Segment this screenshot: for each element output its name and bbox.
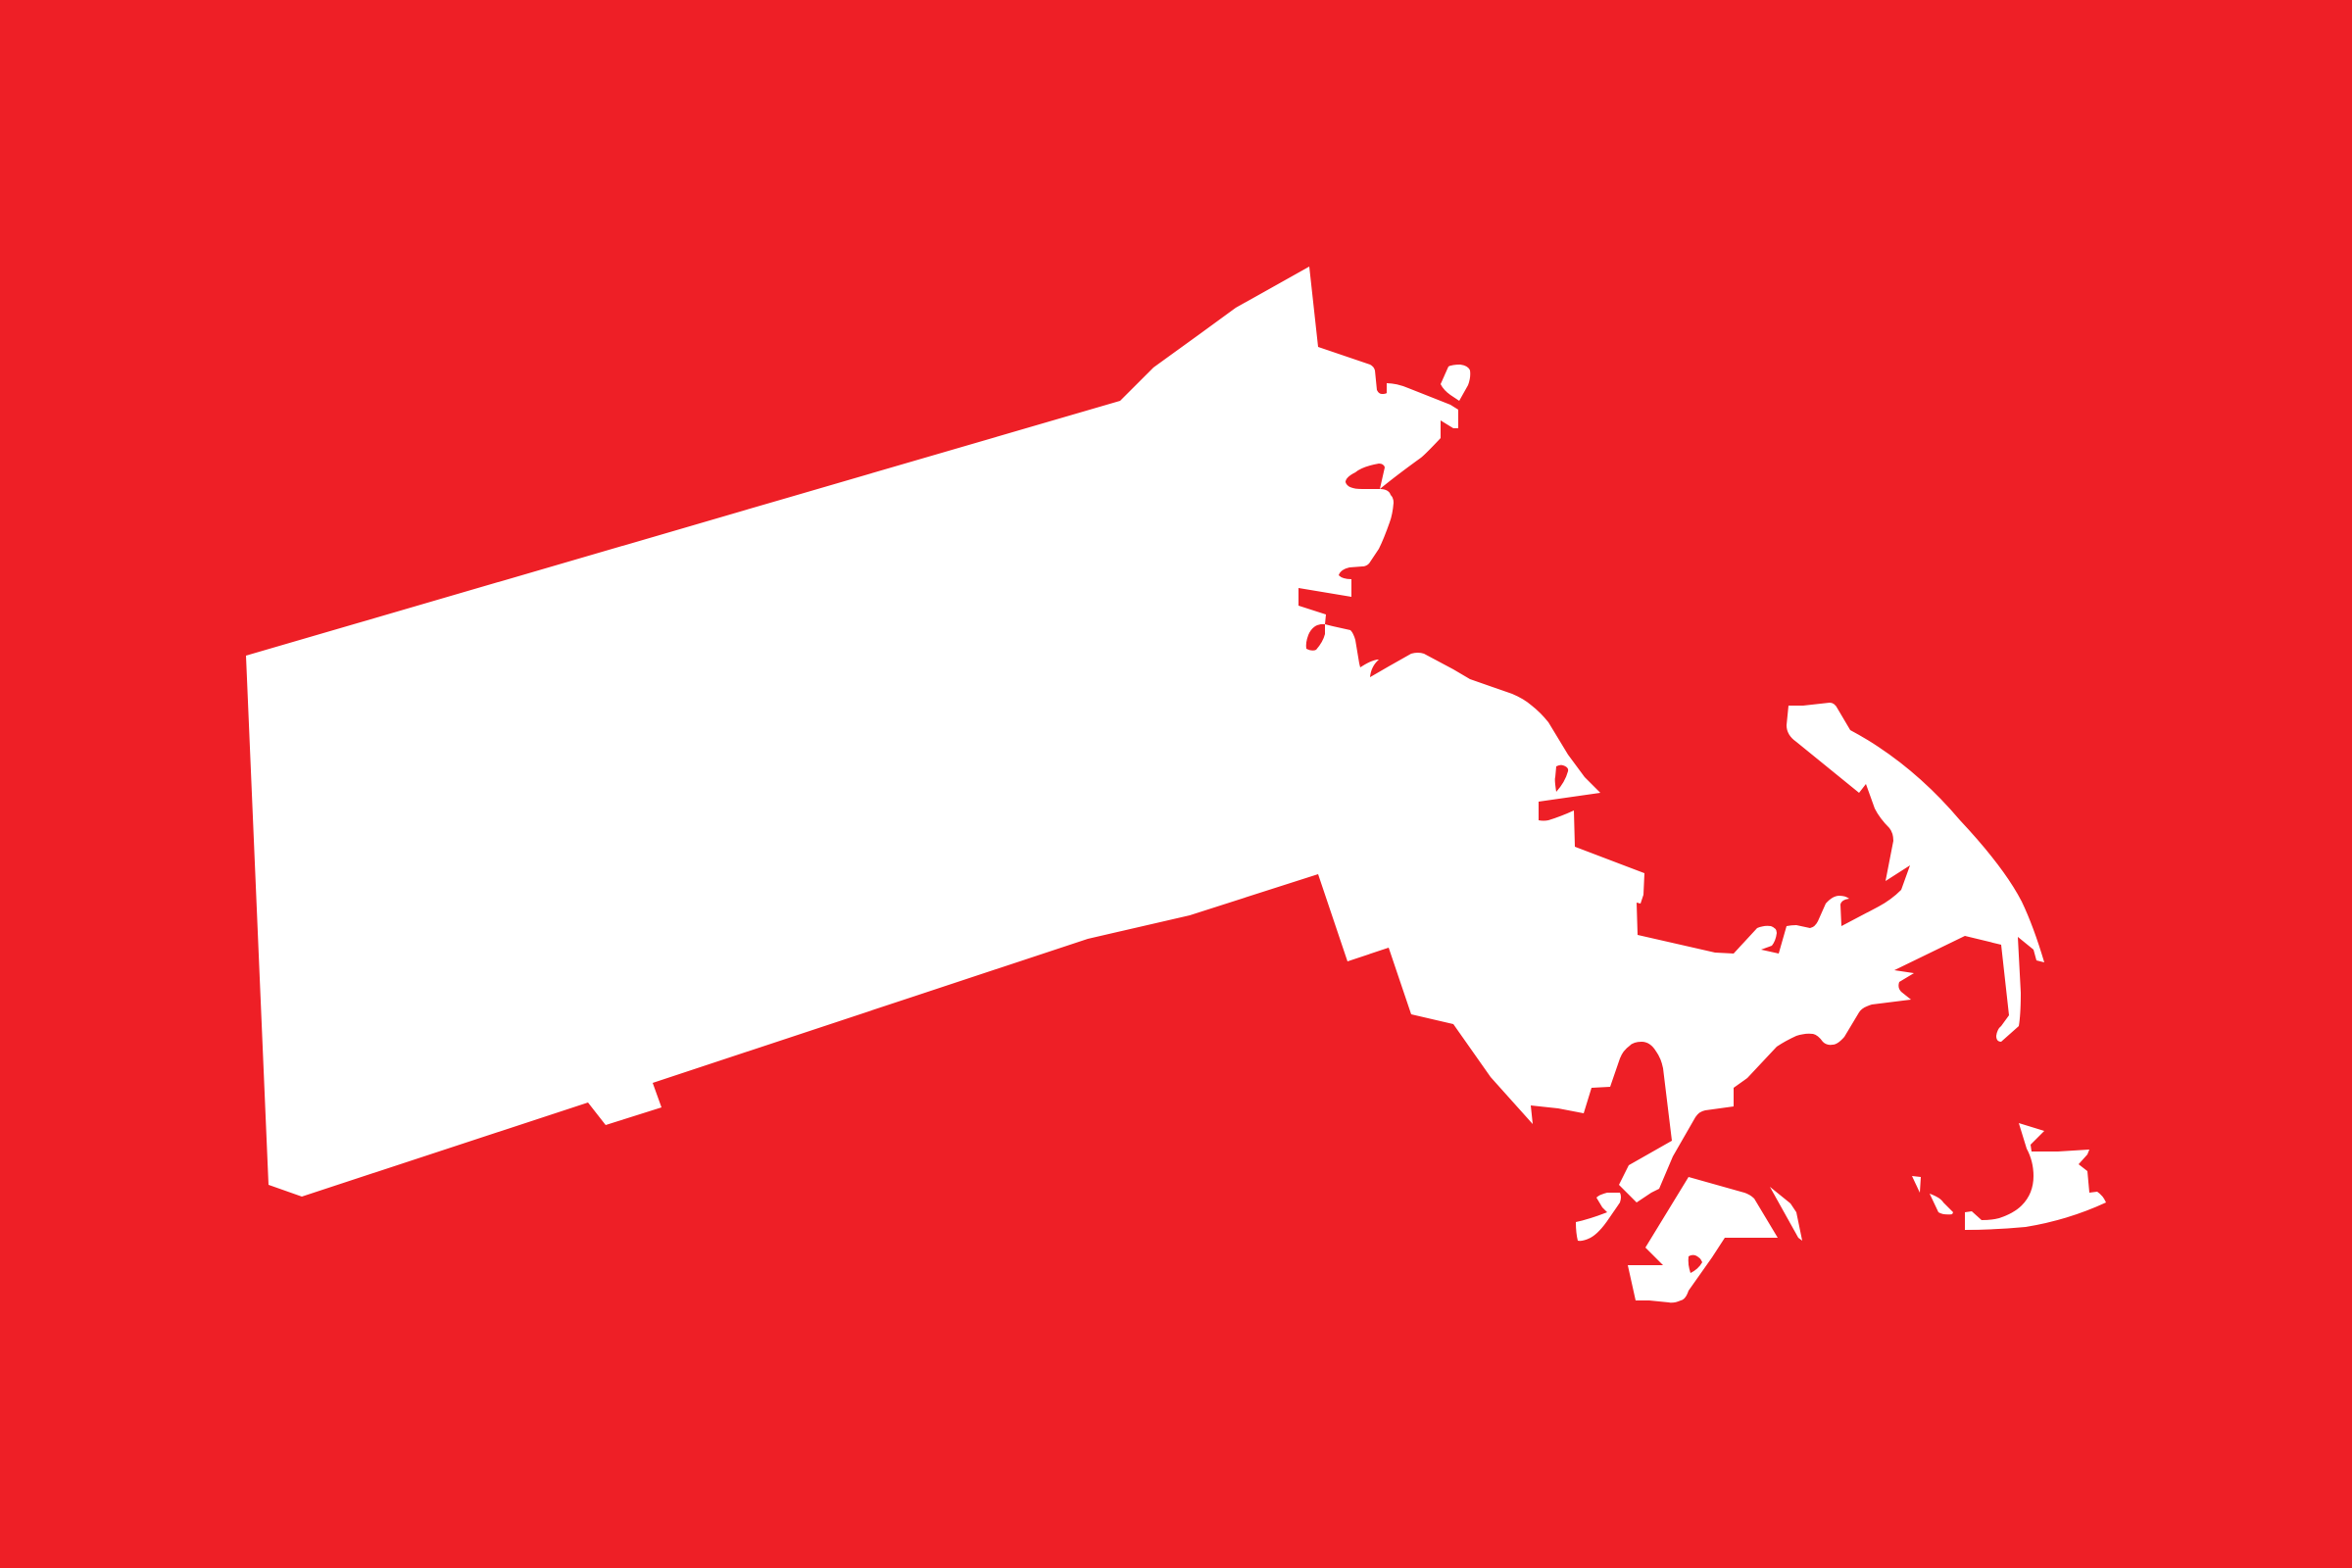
island: Tuckernuck <box>1912 1176 1921 1193</box>
pond: south shore <box>1555 765 1568 792</box>
island: Chappaquiddick <box>1770 1187 1802 1241</box>
mainland with Cape Cod <box>246 267 2044 1202</box>
inland ponds <box>1306 624 1702 1273</box>
pond: coastal north <box>1306 624 1325 651</box>
map: Massachusetts silhouette <box>246 267 2106 1302</box>
island: Martha's Vineyard <box>1628 1177 1778 1302</box>
pond: Martha's Vineyard <box>1689 1255 1702 1273</box>
island: north shore <box>1441 365 1470 401</box>
island: Elizabeth Islands <box>1576 1193 1621 1241</box>
island: Muskeget <box>1930 1194 1953 1214</box>
island: Nantucket <box>1965 1123 2106 1230</box>
